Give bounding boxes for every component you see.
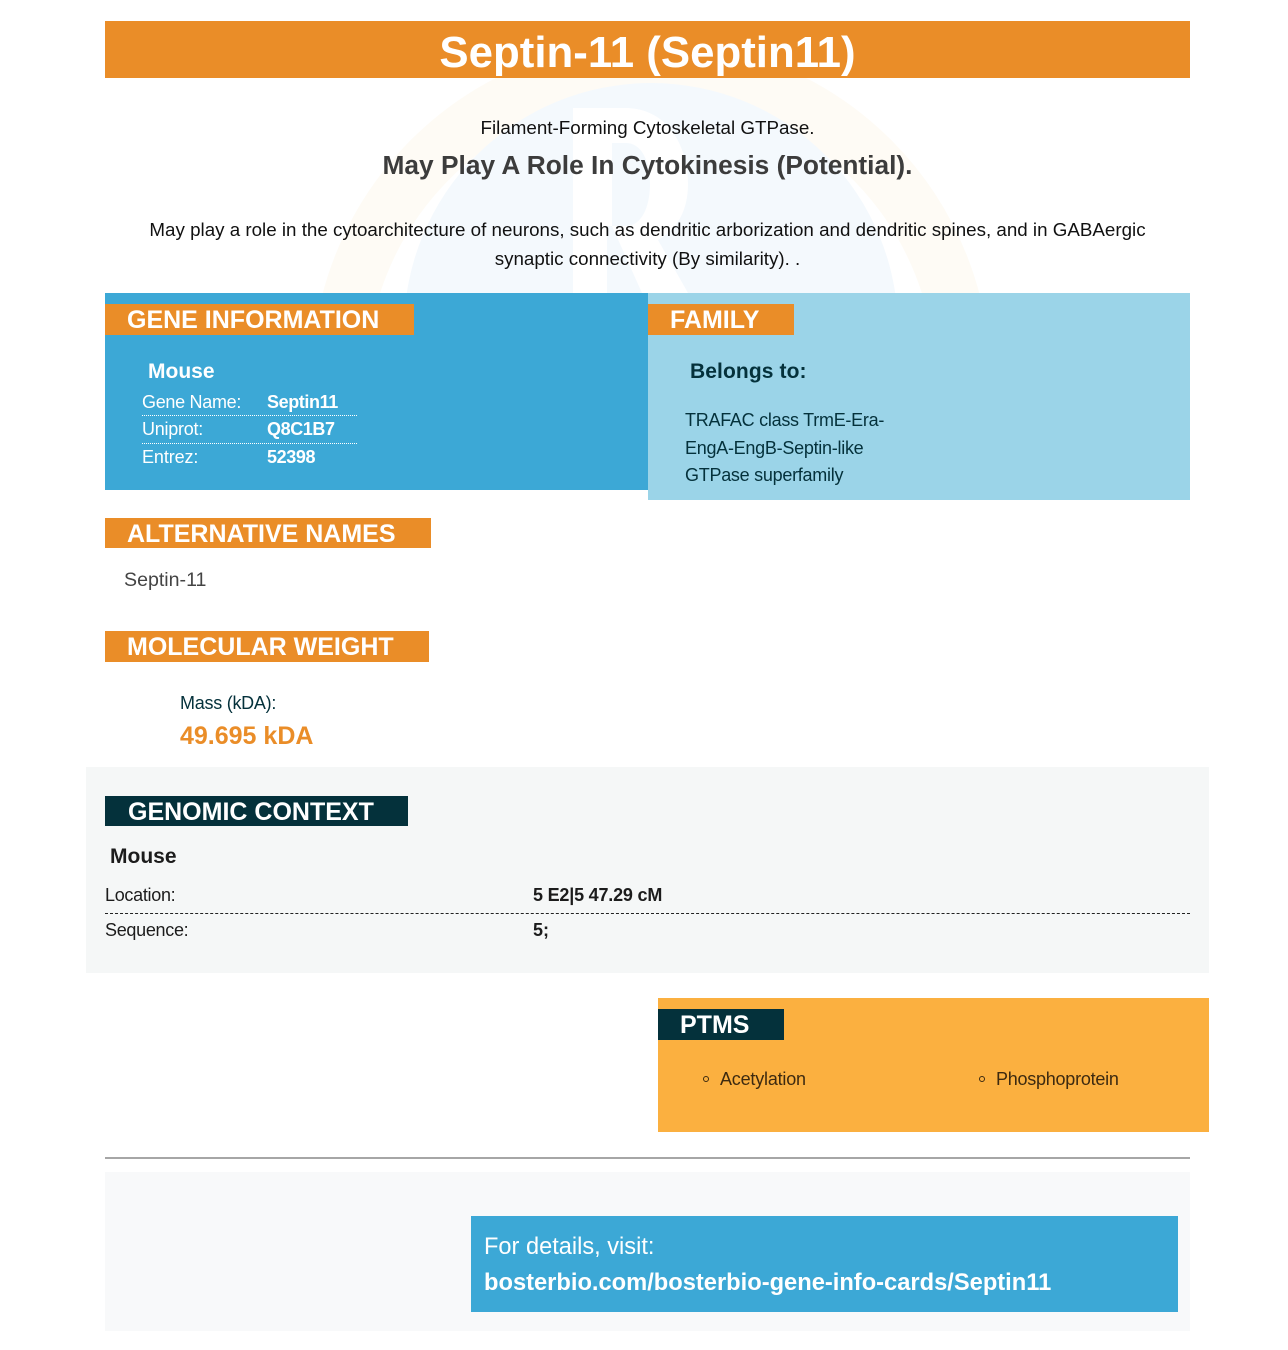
description <box>149 219 1146 269</box>
family text: EngA-EngB-Septin-like <box>685 438 863 458</box>
heading: gene information: GENE INFORMATION <box>127 306 379 334</box>
description: May play a role in the cytoarchitecture of neurons, such as dendritic arborization and dendritic spines, and in GABAergic <box>149 219 1146 240</box>
function heading: May Play A Role In Cytokinesis (Potential). <box>383 150 912 180</box>
location row: 5 E2|5 47.29 cM <box>533 885 662 905</box>
heading: family: FAMILY <box>670 306 759 334</box>
species label: Mouse <box>148 360 215 383</box>
subtitle: Filament-Forming Cytoskeletal GTPase. <box>480 117 814 138</box>
heading: ptms <box>658 1009 784 1040</box>
mass value: 49.695 kDA <box>180 722 313 750</box>
sequence row: Sequence: <box>105 920 188 940</box>
gene info table: Uniprot: <box>142 419 203 439</box>
ptm item: phosphoprotein: Phosphoprotein <box>996 1069 1119 1089</box>
panel: family <box>648 293 1190 500</box>
panel: gene information <box>105 293 648 490</box>
title banner: Septin-11 (Septin11) <box>439 28 856 77</box>
title banner <box>105 21 1190 78</box>
heading: genomic context: GENOMIC CONTEXT <box>128 798 374 826</box>
gene info table: Septin11 <box>267 392 338 412</box>
heading: molecular weight: MOLECULAR WEIGHT <box>127 633 394 661</box>
location row: Location: <box>105 885 175 905</box>
callout label: For details, visit: <box>484 1234 654 1260</box>
family text: GTPase superfamily <box>685 465 843 485</box>
description: synaptic connectivity (By similarity). . <box>495 248 800 269</box>
species label: Mouse <box>110 845 177 868</box>
gene info table: 52398 <box>267 447 315 467</box>
family text: TRAFAC class TrmE-Era- <box>685 410 884 430</box>
ptm item: acetylation: Acetylation <box>720 1069 806 1089</box>
watermark logo <box>323 78 979 293</box>
alternative names text: Septin-11 <box>124 569 206 591</box>
heading: family <box>648 304 794 335</box>
location row <box>105 882 1190 914</box>
panel: footer <box>105 1172 1190 1331</box>
gene info table: Gene Name: <box>142 392 241 412</box>
sequence row <box>105 920 549 940</box>
callout url: bosterbio.com/bosterbio-gene-info-cards/Septin11 <box>484 1270 1051 1296</box>
sequence row: 5; <box>533 920 549 940</box>
gene info table <box>142 392 357 467</box>
callout: details link <box>471 1216 1178 1312</box>
panel: genomic context <box>86 767 1209 973</box>
gene info table: Entrez: <box>142 447 198 467</box>
family text <box>685 410 884 485</box>
belongs to label: Belongs to: <box>690 360 807 383</box>
panel: ptms <box>658 998 1209 1132</box>
gene info table: Q8C1B7 <box>267 419 335 439</box>
heading: alternative names: ALTERNATIVE NAMES <box>127 520 396 548</box>
mass label: Mass (kDA): <box>180 693 276 713</box>
heading: ptms: PTMS <box>680 1011 749 1039</box>
